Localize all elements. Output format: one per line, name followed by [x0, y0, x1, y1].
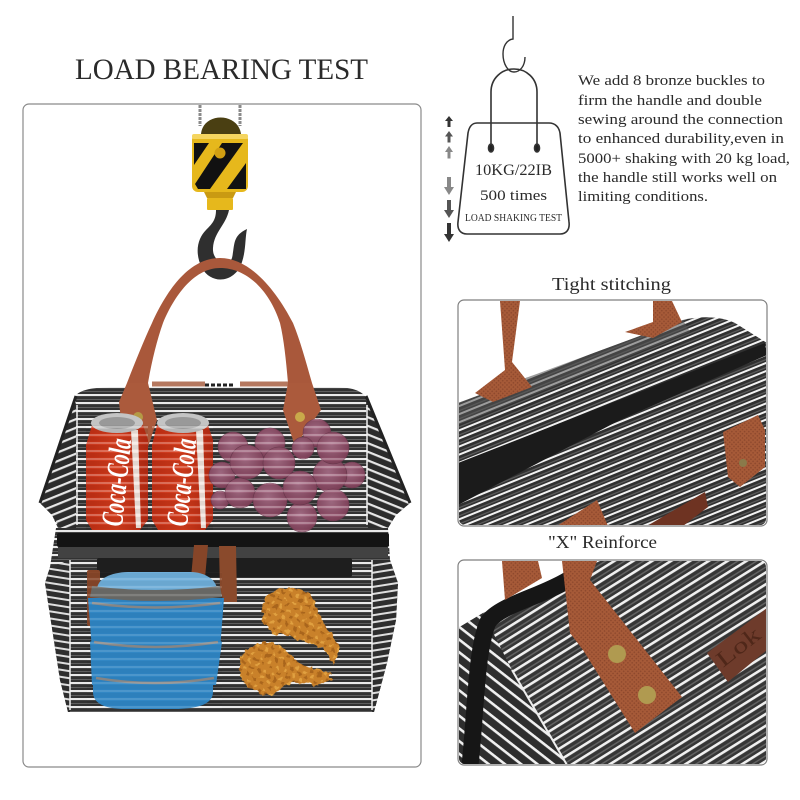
- handle right: [625, 301, 682, 338]
- bag: zipper pulls: [87, 545, 237, 626]
- weight label: times: 500 times: [480, 188, 547, 204]
- bag: lower compartment: [45, 528, 398, 712]
- leather patch: Lok: [711, 621, 765, 672]
- text block: description: the handle still works well on: [578, 170, 778, 186]
- bag body: [458, 561, 767, 765]
- object: cola can 2: [152, 413, 213, 530]
- side tab with rivet: [723, 415, 765, 487]
- object: fried chicken: [239, 588, 340, 696]
- text block: description: 5000+ shaking with 20 kg load,: [578, 151, 790, 167]
- rear handle: [502, 561, 542, 600]
- icon: hook: [503, 16, 525, 72]
- bag: handle: [127, 258, 312, 383]
- ridge shading: [458, 320, 690, 425]
- leather label: [647, 492, 708, 526]
- weight label: 10kg: 10KG/22IB: [475, 162, 552, 179]
- weight label: test name: LOAD SHAKING TEST: [465, 213, 563, 224]
- side gusset: [458, 613, 567, 765]
- heading: x reinforce: "X" Reinforce: [548, 532, 657, 552]
- icon: up arrows: [445, 116, 453, 158]
- icon: crane hook: [192, 105, 248, 279]
- zipper: [470, 580, 568, 765]
- bag body: [458, 317, 767, 526]
- text block: description: [578, 73, 790, 205]
- bottom tab: [557, 500, 608, 526]
- panel: load bearing photo: [23, 104, 421, 767]
- object: blue lunch box: [87, 572, 224, 709]
- pocket seam: [512, 670, 567, 765]
- panel: x reinforce photo: [458, 560, 767, 765]
- text block: description: We add 8 bronze buckles to: [578, 73, 765, 89]
- object: cola can 2: Coca-Cola: [159, 437, 203, 528]
- bag: strap tabs front: [119, 383, 321, 447]
- object: cola can 1: [86, 413, 148, 530]
- diagram: load shaking test: [444, 16, 569, 242]
- title: LOAD BEARING TEST: [75, 53, 368, 86]
- text block: description: limiting conditions.: [578, 189, 708, 205]
- text block: description: sewing around the connection: [578, 112, 784, 128]
- text block: description: to enhanced durability,even in: [578, 131, 785, 147]
- front strap: [562, 561, 682, 733]
- object: cola can 1: Coca-Cola: [94, 437, 138, 528]
- text block: description: firm the handle and double: [578, 93, 762, 109]
- rivet bottom: [638, 686, 656, 704]
- handle left: [475, 301, 532, 402]
- leather patch: [707, 608, 767, 682]
- icon: weight bag: [458, 69, 569, 234]
- zipper band: [458, 343, 767, 505]
- rivet top: [608, 645, 626, 663]
- bag: main body upper: [40, 384, 410, 528]
- panel: tight stitching photo: [458, 300, 767, 526]
- object: grapes: [205, 415, 370, 535]
- heading: tight stitching: Tight stitching: [552, 274, 671, 294]
- icon: down arrows: [444, 177, 454, 242]
